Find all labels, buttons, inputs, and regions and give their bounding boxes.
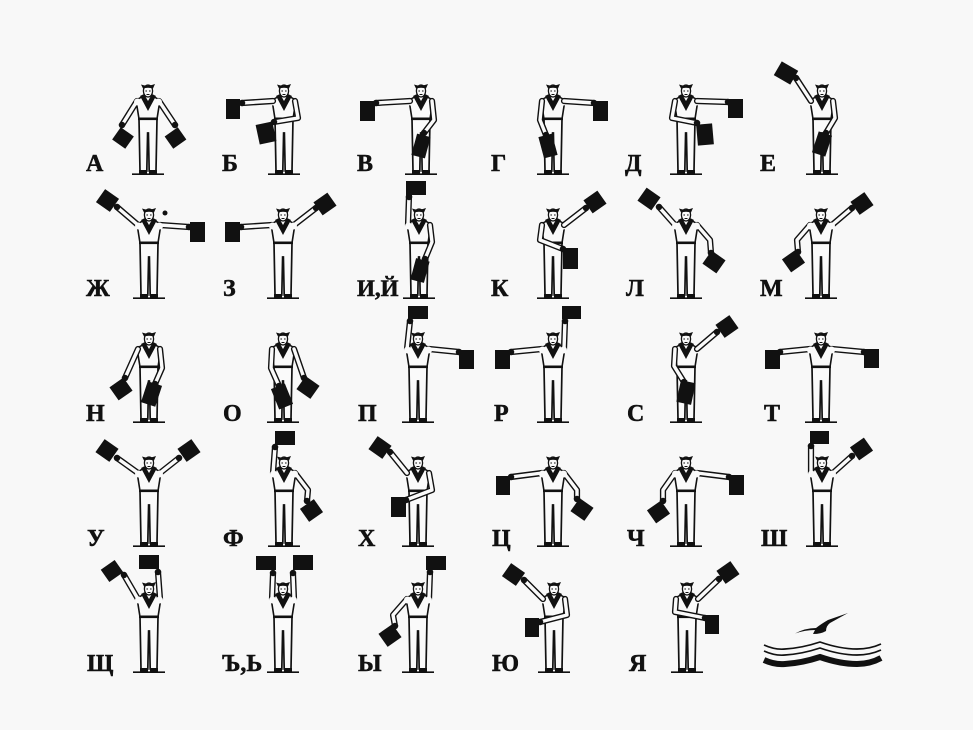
signal: Ю [492, 563, 570, 677]
letter А: А [86, 151, 104, 177]
signal: Д [625, 84, 743, 177]
sailor Ч [647, 456, 744, 547]
signal: И,Й [357, 181, 435, 301]
icon: seagull [795, 613, 848, 634]
letter Ъ,Ь: Ъ,Ь [222, 651, 262, 677]
sailor В [360, 84, 437, 175]
sailor Х [368, 436, 434, 547]
signal: Ф [223, 431, 323, 552]
sailor Г [537, 84, 608, 175]
letter Х: Х [358, 526, 376, 552]
sailor У [95, 439, 201, 547]
signal: Б [222, 84, 300, 177]
signal: В [357, 84, 437, 177]
signal: Л [626, 188, 726, 302]
signal: Ж [86, 189, 205, 302]
signal: Г [491, 84, 608, 177]
sailor П [402, 306, 474, 423]
signal: Р [494, 306, 581, 427]
sailor Ш [806, 431, 873, 547]
letter Ц: Ц [492, 526, 511, 552]
signal: С [627, 315, 739, 427]
sailor Я [671, 561, 740, 673]
sailor Д [670, 84, 743, 175]
letter О: О [223, 401, 242, 427]
letter У: У [87, 526, 105, 552]
sailor Ъ,Ь [256, 555, 313, 673]
letter Т: Т [764, 401, 780, 427]
letter З: З [223, 276, 236, 302]
letter Р: Р [494, 401, 509, 427]
signal: К [491, 191, 607, 302]
signal: Т [764, 332, 879, 427]
letter Д: Д [625, 151, 642, 177]
letter П: П [358, 401, 377, 427]
signal: Н [86, 332, 165, 427]
letter Ч: Ч [627, 526, 645, 552]
emblem: seagull over waves [764, 613, 881, 664]
sailor О [267, 332, 320, 423]
sailor Ж [96, 189, 205, 299]
icon: waves [764, 642, 881, 664]
sailor Е [774, 61, 838, 175]
letter Ф: Ф [223, 526, 244, 552]
letter Б: Б [222, 151, 238, 177]
signal: О [223, 332, 320, 427]
letter С: С [627, 401, 644, 427]
sailor Ц [496, 456, 594, 547]
letter Л: Л [626, 276, 644, 302]
sailor Л [637, 188, 726, 299]
sailor А [112, 84, 186, 175]
signal: У [87, 439, 201, 552]
signal: Ы [358, 556, 446, 677]
letter В: В [357, 151, 373, 177]
signal: Ч [627, 456, 744, 552]
letter Щ: Щ [87, 651, 114, 677]
letter Я: Я [629, 651, 646, 677]
signal: Ш [761, 431, 873, 552]
letter Е: Е [760, 151, 776, 177]
letter Г: Г [491, 151, 506, 177]
sailor Н [109, 332, 165, 423]
sailor С [670, 315, 739, 423]
sailor Ю [502, 563, 570, 673]
sailor Т [765, 332, 879, 423]
letter М: М [760, 276, 783, 302]
sailor Р [495, 306, 581, 423]
sailor М [782, 192, 874, 299]
signal: Х [358, 436, 434, 552]
letter Ш: Ш [761, 526, 787, 552]
signal: А [86, 84, 186, 177]
sailor К [537, 191, 607, 299]
signal: Е [760, 61, 838, 177]
letter И,Й: И,Й [357, 276, 399, 301]
signal: М [760, 192, 874, 302]
signal: Щ [87, 555, 165, 677]
letter Ы: Ы [358, 651, 382, 677]
sailor Ы [378, 556, 446, 673]
sailor З [225, 193, 337, 299]
sailor Б [226, 84, 300, 175]
sailor И [403, 181, 435, 299]
signal: Ъ,Ь [222, 555, 313, 677]
letter К: К [491, 276, 509, 302]
signal: Я [629, 561, 740, 677]
signal: З [223, 193, 337, 302]
signal: П [358, 306, 474, 427]
letter Н: Н [86, 401, 105, 427]
signal: Ц [492, 456, 594, 552]
sailor Щ [101, 555, 165, 673]
sailor Ф [268, 431, 323, 547]
letter Ж: Ж [86, 276, 110, 302]
letter Ю: Ю [492, 651, 519, 677]
